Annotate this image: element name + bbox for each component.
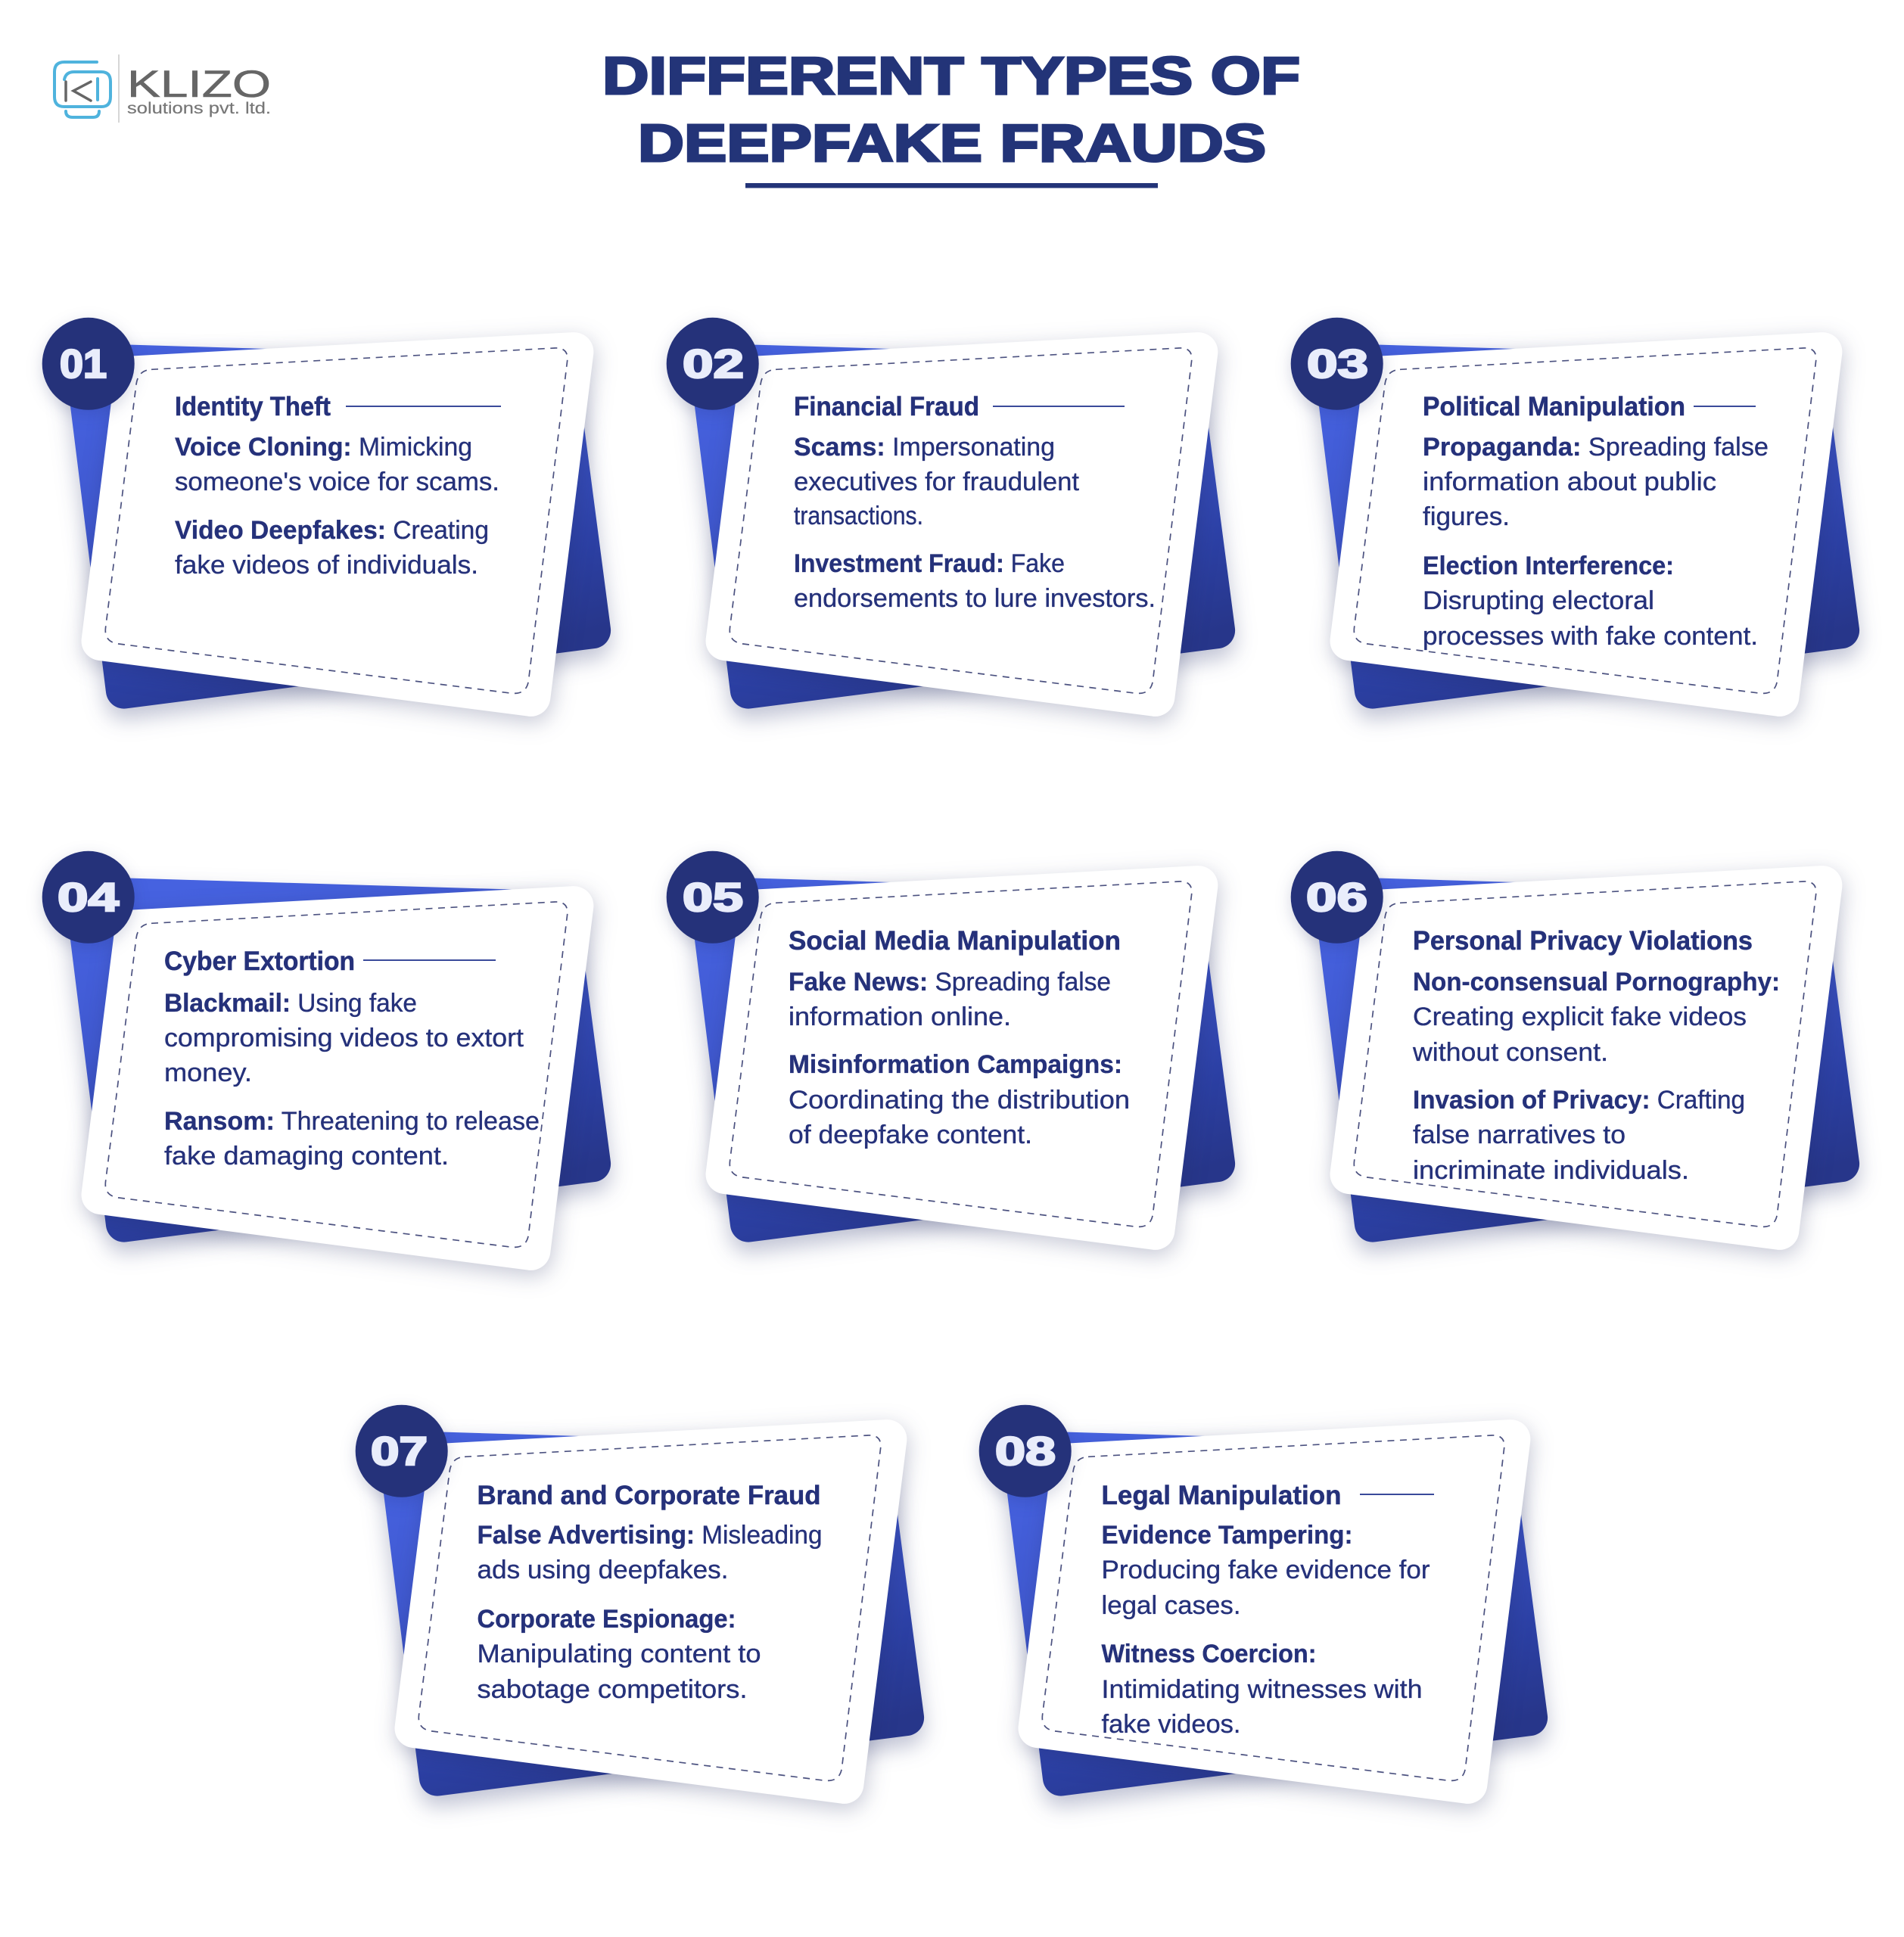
panel: 06 Personal Privacy Violations: Invasion of Privacy: Crafting — [1413, 1086, 1745, 1115]
panel: 07 Brand and Corporate Fraud: Brand and Corporate Fraud — [477, 1481, 820, 1510]
panel: 06 Personal Privacy Violations: Personal Privacy Violations — [1413, 926, 1753, 956]
panel: 01 Identity Theft: Voice Cloning: Mimicking — [175, 433, 472, 462]
panel: 06 Personal Privacy Violations — [1291, 851, 1841, 1230]
panel: 06 Personal Privacy Violations: Creating explicit fake videos — [1413, 1003, 1747, 1031]
panel: 03 Political Manipulation — [1291, 318, 1841, 697]
panel: 04 Cyber Extortion: Blackmail: Using fake — [164, 989, 417, 1018]
panel: 08 Legal Manipulation: Witness Coercion: — [1102, 1640, 1317, 1668]
panel: 08 Legal Manipulation: Legal Manipulation — [1102, 1481, 1341, 1510]
panel: 08 Legal Manipulation: 08 — [995, 1429, 1056, 1474]
panel: 03 Political Manipulation: Propaganda: Spreading false — [1423, 433, 1769, 462]
panel: 02 Financial Fraud: executives for fraudulent — [794, 468, 1080, 496]
panel: 08 Legal Manipulation: Intimidating witnesses with — [1102, 1675, 1423, 1704]
panel: 05 Social Media Manipulation: of deepfake content. — [789, 1121, 1032, 1149]
icon: logo mark — [54, 62, 110, 117]
panel: 08 Legal Manipulation: Producing fake evidence for — [1102, 1556, 1430, 1584]
title: DIFFERENT TYPES OF — [602, 46, 1300, 105]
panel: 04 Cyber Extortion: 04 — [58, 875, 120, 920]
panel: 05 Social Media Manipulation: Misinformation Campaigns: — [789, 1050, 1122, 1079]
panel: 04 Cyber Extortion: money. — [164, 1059, 252, 1087]
panel: 07 Brand and Corporate Fraud: ads using deepfakes. — [477, 1556, 728, 1584]
panel: 04 Cyber Extortion: compromising videos to extort — [164, 1024, 524, 1052]
panel: 07 Brand and Corporate Fraud — [356, 1405, 906, 1784]
panel: 07 Brand and Corporate Fraud: Corporate Espionage: — [477, 1605, 736, 1634]
panel: 03 Political Manipulation: processes with fake content. — [1423, 622, 1758, 651]
panel: 05 Social Media Manipulation: Coordinating the distribution — [789, 1086, 1130, 1115]
logo: Klizo: solutions pvt. ltd. — [127, 100, 271, 117]
logo: Klizo: KLIZO — [127, 63, 271, 105]
panel: 01 Identity Theft: Video Deepfakes: Creating — [175, 516, 489, 545]
panel: 08 Legal Manipulation — [979, 1405, 1529, 1784]
panel: 04 Cyber Extortion — [42, 851, 593, 1251]
panel: 02 Financial Fraud — [667, 318, 1217, 697]
panel: 01 Identity Theft: fake videos of individuals. — [175, 551, 478, 580]
panel: 07 Brand and Corporate Fraud: sabotage competitors. — [477, 1675, 748, 1704]
panel: 03 Political Manipulation: information about public — [1423, 468, 1716, 496]
panel: 05 Social Media Manipulation: information online. — [789, 1003, 1011, 1031]
panel: 02 Financial Fraud: 02 — [683, 342, 744, 387]
panel: 01 Identity Theft — [42, 318, 593, 697]
panel: 06 Personal Privacy Violations: incriminate individuals. — [1413, 1156, 1689, 1185]
panel: 07 Brand and Corporate Fraud: False Advertising: Misleading — [477, 1521, 822, 1550]
panel: 01 Identity Theft: Identity Theft — [175, 392, 331, 421]
panel: 01 Identity Theft: someone's voice for scams. — [175, 468, 499, 496]
panel: 05 Social Media Manipulation: 05 — [683, 875, 743, 920]
panel: 02 Financial Fraud: Investment Fraud: Fake — [794, 549, 1065, 578]
panel: 02 Financial Fraud: endorsements to lure investors. — [794, 584, 1156, 613]
panel: 05 Social Media Manipulation — [667, 851, 1217, 1230]
panel: 06 Personal Privacy Violations: Non-consensual Pornography: — [1413, 968, 1780, 996]
panel: 04 Cyber Extortion: fake damaging content. — [164, 1142, 449, 1171]
panel: 07 Brand and Corporate Fraud: Manipulating content to — [477, 1640, 761, 1668]
panel: 08 Legal Manipulation: fake videos. — [1102, 1710, 1241, 1739]
panel: 03 Political Manipulation: 03 — [1307, 342, 1368, 387]
panel: 03 Political Manipulation: Election Interference: — [1423, 552, 1674, 580]
title: DEEPFAKE FRAUDS — [638, 113, 1266, 173]
panel: 02 Financial Fraud: transactions. — [794, 502, 923, 530]
panel: 02 Financial Fraud: Financial Fraud — [794, 392, 979, 421]
panel: 08 Legal Manipulation: legal cases. — [1102, 1591, 1241, 1620]
panel: 06 Personal Privacy Violations: without consent. — [1412, 1038, 1608, 1067]
panel: 06 Personal Privacy Violations: 06 — [1306, 875, 1367, 920]
panel: 05 Social Media Manipulation: Fake News: Spreading false — [789, 968, 1111, 996]
logo: Klizo — [54, 54, 271, 123]
title — [602, 46, 1300, 188]
panel: 03 Political Manipulation: figures. — [1423, 502, 1510, 531]
panel: 06 Personal Privacy Violations: false narratives to — [1413, 1121, 1626, 1149]
panel: 03 Political Manipulation: Disrupting electoral — [1423, 586, 1654, 615]
panel: 01 Identity Theft: 01 — [60, 342, 107, 387]
panel: 04 Cyber Extortion: Cyber Extortion — [164, 947, 355, 976]
panel: 02 Financial Fraud: Scams: Impersonating — [794, 433, 1055, 462]
panel: 08 Legal Manipulation: Evidence Tampering: — [1102, 1521, 1353, 1550]
panel: 05 Social Media Manipulation: Social Media Manipulation — [789, 926, 1121, 956]
panel: 04 Cyber Extortion: Ransom: Threatening to release — [164, 1107, 540, 1136]
panel: 07 Brand and Corporate Fraud: 07 — [371, 1429, 428, 1474]
panel: 03 Political Manipulation: Political Manipulation — [1423, 392, 1685, 421]
